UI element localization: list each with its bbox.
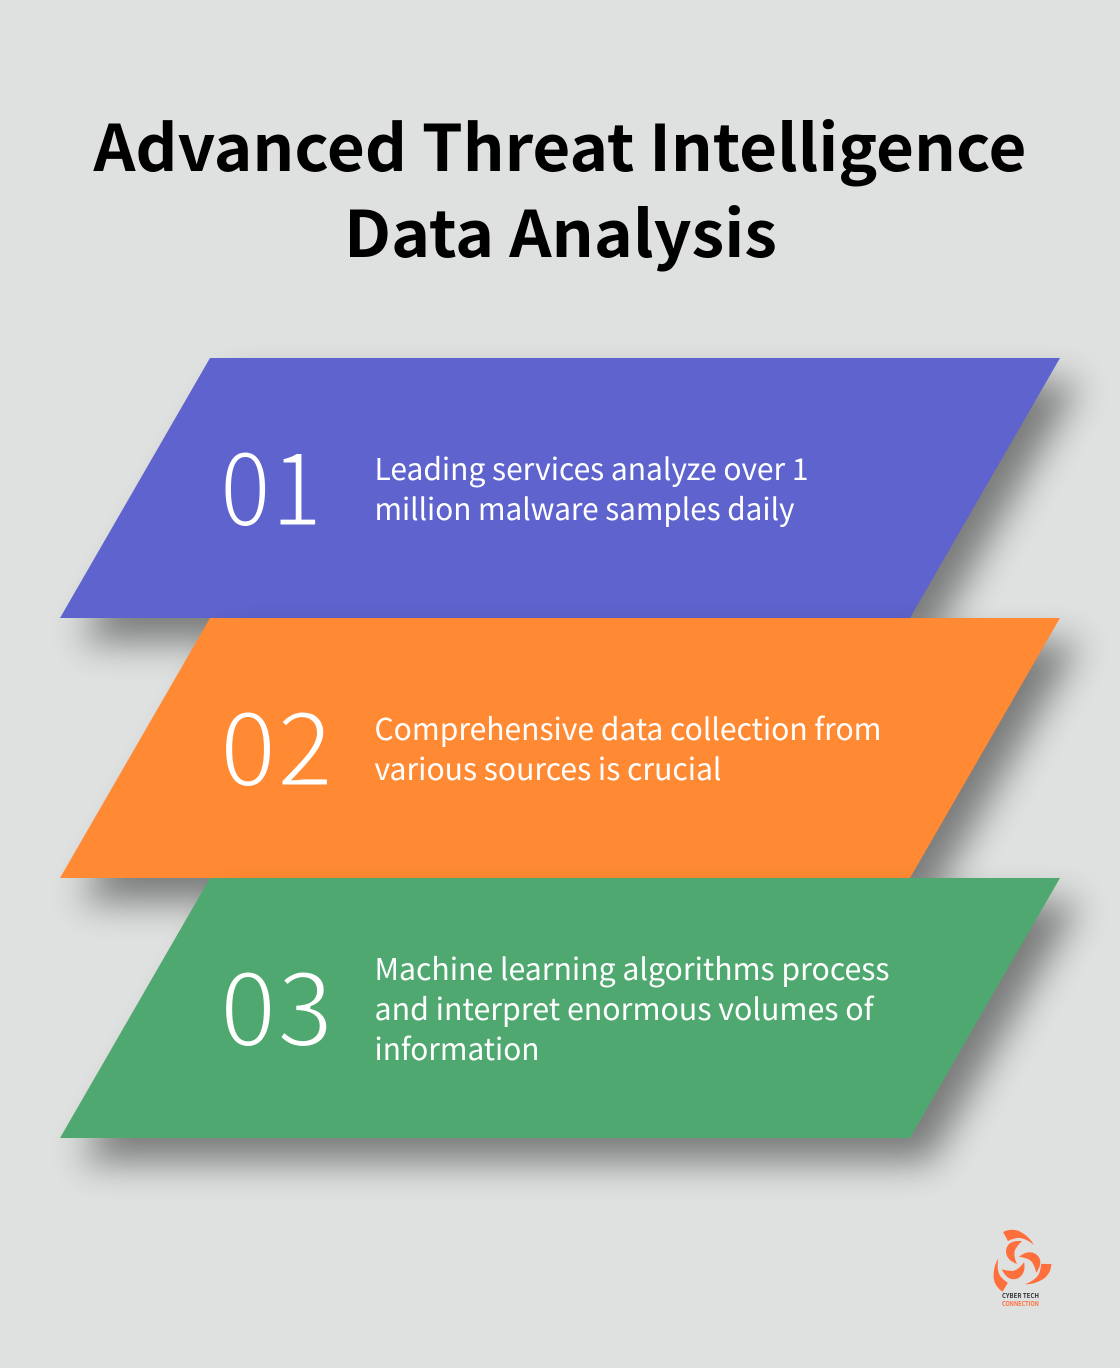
text block 02: various sources is crucial bbox=[374, 745, 722, 789]
number 03: 03 bbox=[220, 927, 334, 1076]
text block 03: and interpret enormous volumes of bbox=[374, 985, 875, 1029]
panel: step 03 bbox=[60, 878, 1080, 1162]
text block 01 bbox=[374, 445, 808, 529]
text block 02: Comprehensive data collection from bbox=[374, 705, 882, 749]
text block 01: million malware samples daily bbox=[374, 485, 795, 529]
icon: Cyber Tech Connection logo: CYBER TECH bbox=[1002, 1290, 1039, 1300]
number 02: 02 bbox=[220, 667, 334, 816]
icon: Cyber Tech Connection logo: CONNECTION bbox=[1002, 1298, 1039, 1308]
text block 03 bbox=[374, 945, 890, 1069]
panel: step 02 bbox=[60, 618, 1080, 902]
title bbox=[92, 98, 1026, 276]
title: Data Analysis bbox=[344, 184, 777, 276]
panel: step 01 bbox=[60, 358, 1080, 642]
text block 03: information bbox=[374, 1025, 540, 1069]
text block 02 bbox=[374, 705, 882, 789]
number 01: 01 bbox=[220, 407, 322, 556]
title: Advanced Threat Intelligence bbox=[92, 98, 1026, 190]
icon: Cyber Tech Connection logo bbox=[985, 1230, 1053, 1308]
text block 03: Machine learning algorithms process bbox=[374, 945, 890, 989]
text block 01: Leading services analyze over 1 bbox=[374, 445, 808, 489]
